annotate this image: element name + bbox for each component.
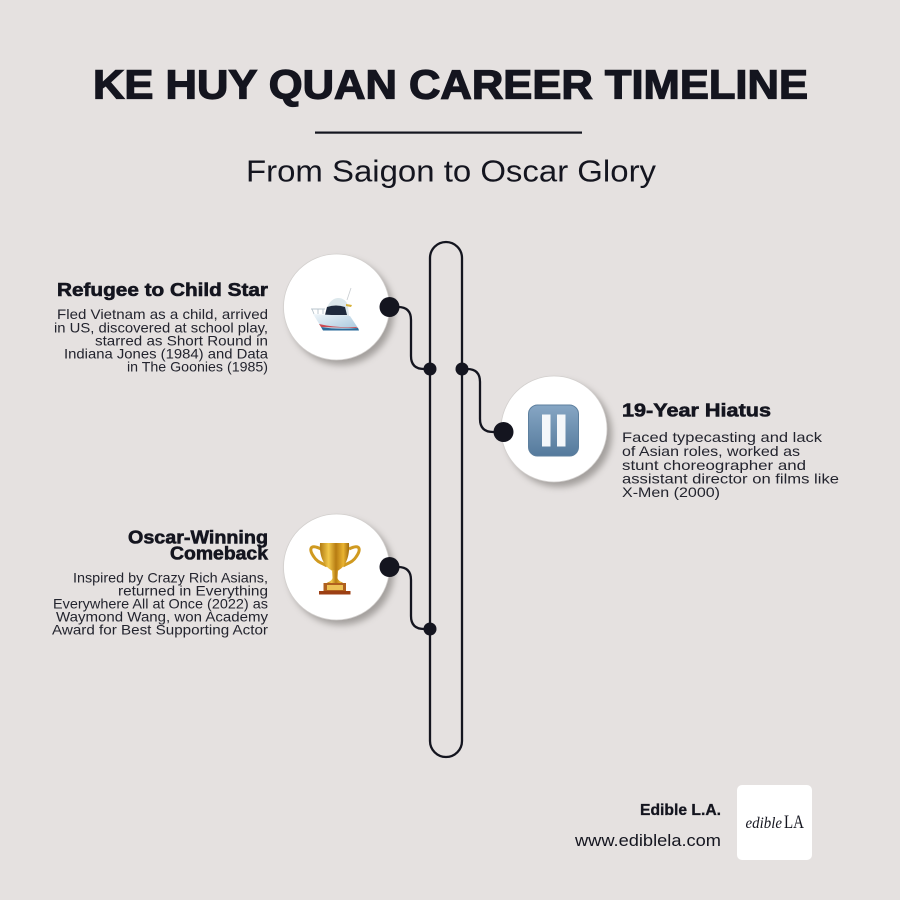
text block: refugee to child star: Fled Vietnam as a child, arrived bbox=[57, 307, 268, 322]
text block: 19-year hiatus: Faced typecasting and lack bbox=[622, 430, 822, 445]
text block: oscar-winning comeback: Waymond Wang, won Academy bbox=[56, 610, 268, 625]
logo: LA bbox=[784, 813, 805, 833]
text block: 19-year hiatus bbox=[622, 400, 839, 500]
heading: hiatus: 19-Year Hiatus bbox=[622, 400, 771, 421]
text block: refugee to child star bbox=[54, 279, 268, 375]
node: hiatus dot bbox=[494, 422, 514, 442]
text block: oscar-winning comeback bbox=[52, 526, 269, 638]
heading: oscar bbox=[128, 526, 269, 564]
text block: oscar-winning comeback: returned in Everything bbox=[118, 584, 268, 599]
heading: oscar: Comeback bbox=[170, 542, 269, 564]
logo: edible bbox=[746, 815, 782, 832]
text block: oscar-winning comeback: Award for Best Supporting Actor bbox=[52, 623, 269, 638]
text block: 19-year hiatus: assistant director on films like bbox=[622, 472, 839, 486]
node: comeback dot bbox=[380, 557, 400, 577]
text block: refugee to child star: in US, discovered at school play, bbox=[54, 320, 268, 335]
timeline track bbox=[430, 242, 462, 757]
heading: refugee: Refugee to Child Star bbox=[57, 279, 268, 300]
panel: hiatus circle bbox=[501, 376, 612, 487]
icon: pause bbox=[528, 405, 578, 456]
panel: comeback circle bbox=[284, 514, 394, 625]
text block: 19-year hiatus: stunt choreographer and bbox=[622, 458, 806, 473]
connector: comeback bbox=[389, 567, 430, 629]
connector: hiatus bbox=[462, 369, 503, 432]
logo bbox=[737, 785, 812, 860]
connector: refugee bbox=[389, 307, 430, 369]
node: comeback track dot bbox=[424, 622, 436, 636]
footer: website: www.ediblela.com bbox=[574, 832, 721, 850]
heading: oscar: Oscar-Winning bbox=[128, 526, 268, 548]
text block: refugee to child star: Indiana Jones (1984) and Data bbox=[64, 346, 268, 362]
text block: oscar-winning comeback: Everywhere All at Once (2022) as bbox=[53, 597, 268, 612]
text block: 19-year hiatus: X-Men (2000) bbox=[622, 485, 720, 500]
node: hiatus track dot bbox=[456, 362, 468, 376]
node: refugee dot bbox=[380, 297, 400, 317]
text block: refugee to child star: in The Goonies (1985) bbox=[127, 360, 268, 375]
text block: oscar-winning comeback: Inspired by Crazy Rich Asians, bbox=[73, 570, 268, 586]
text block: 19-year hiatus: of Asian roles, worked as bbox=[622, 444, 800, 459]
title: KE HUY QUAN CAREER TIMELINE bbox=[93, 62, 808, 108]
icon: trophy bbox=[311, 543, 359, 594]
icon: boat bbox=[311, 288, 359, 330]
text block: refugee to child star: starred as Short Round in bbox=[95, 334, 268, 348]
subtitle: From Saigon to Oscar Glory bbox=[246, 154, 657, 188]
panel: refugee circle bbox=[284, 254, 394, 365]
footer: source name: Edible L.A. bbox=[640, 802, 721, 819]
node: refugee track dot bbox=[424, 362, 436, 376]
